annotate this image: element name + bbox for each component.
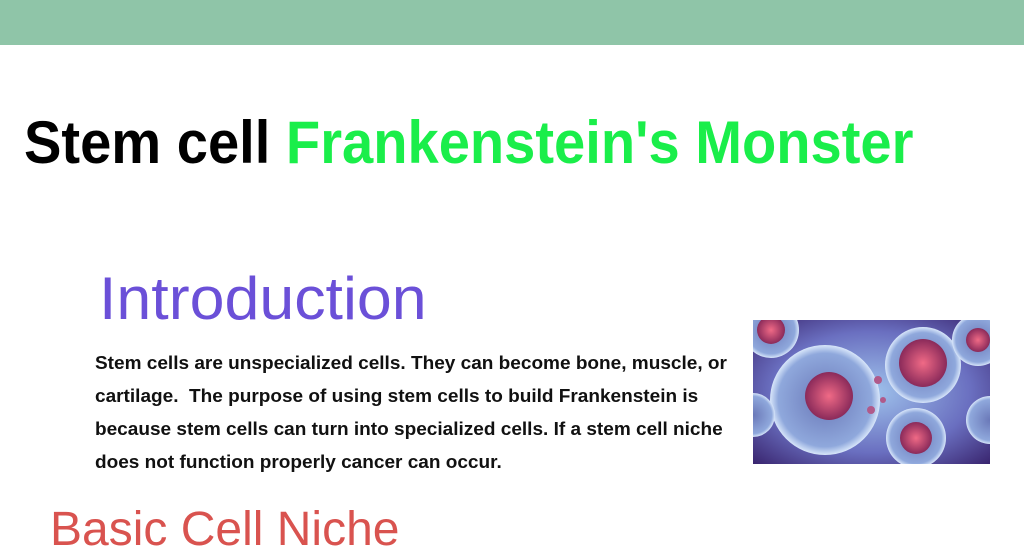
text block: introduction body: cartilage. The purpose of using stem cells to build Frankenstein is	[95, 385, 698, 406]
title: Stem cell Frankenstein's Monster	[24, 109, 913, 176]
image: stem cells	[753, 320, 990, 464]
heading: basic cell niche: Basic Cell Niche	[50, 503, 399, 556]
text block: introduction body: because stem cells can turn into specialized cells. If a stem cell niche	[95, 418, 723, 439]
heading: introduction: Introduction	[99, 265, 427, 332]
text block: introduction body	[95, 352, 727, 472]
text block: introduction body: does not function properly cancer can occur.	[95, 451, 502, 472]
header band	[0, 0, 1024, 45]
text block: introduction body: Stem cells are unspecialized cells. They can become bone, muscle, or	[95, 352, 727, 373]
